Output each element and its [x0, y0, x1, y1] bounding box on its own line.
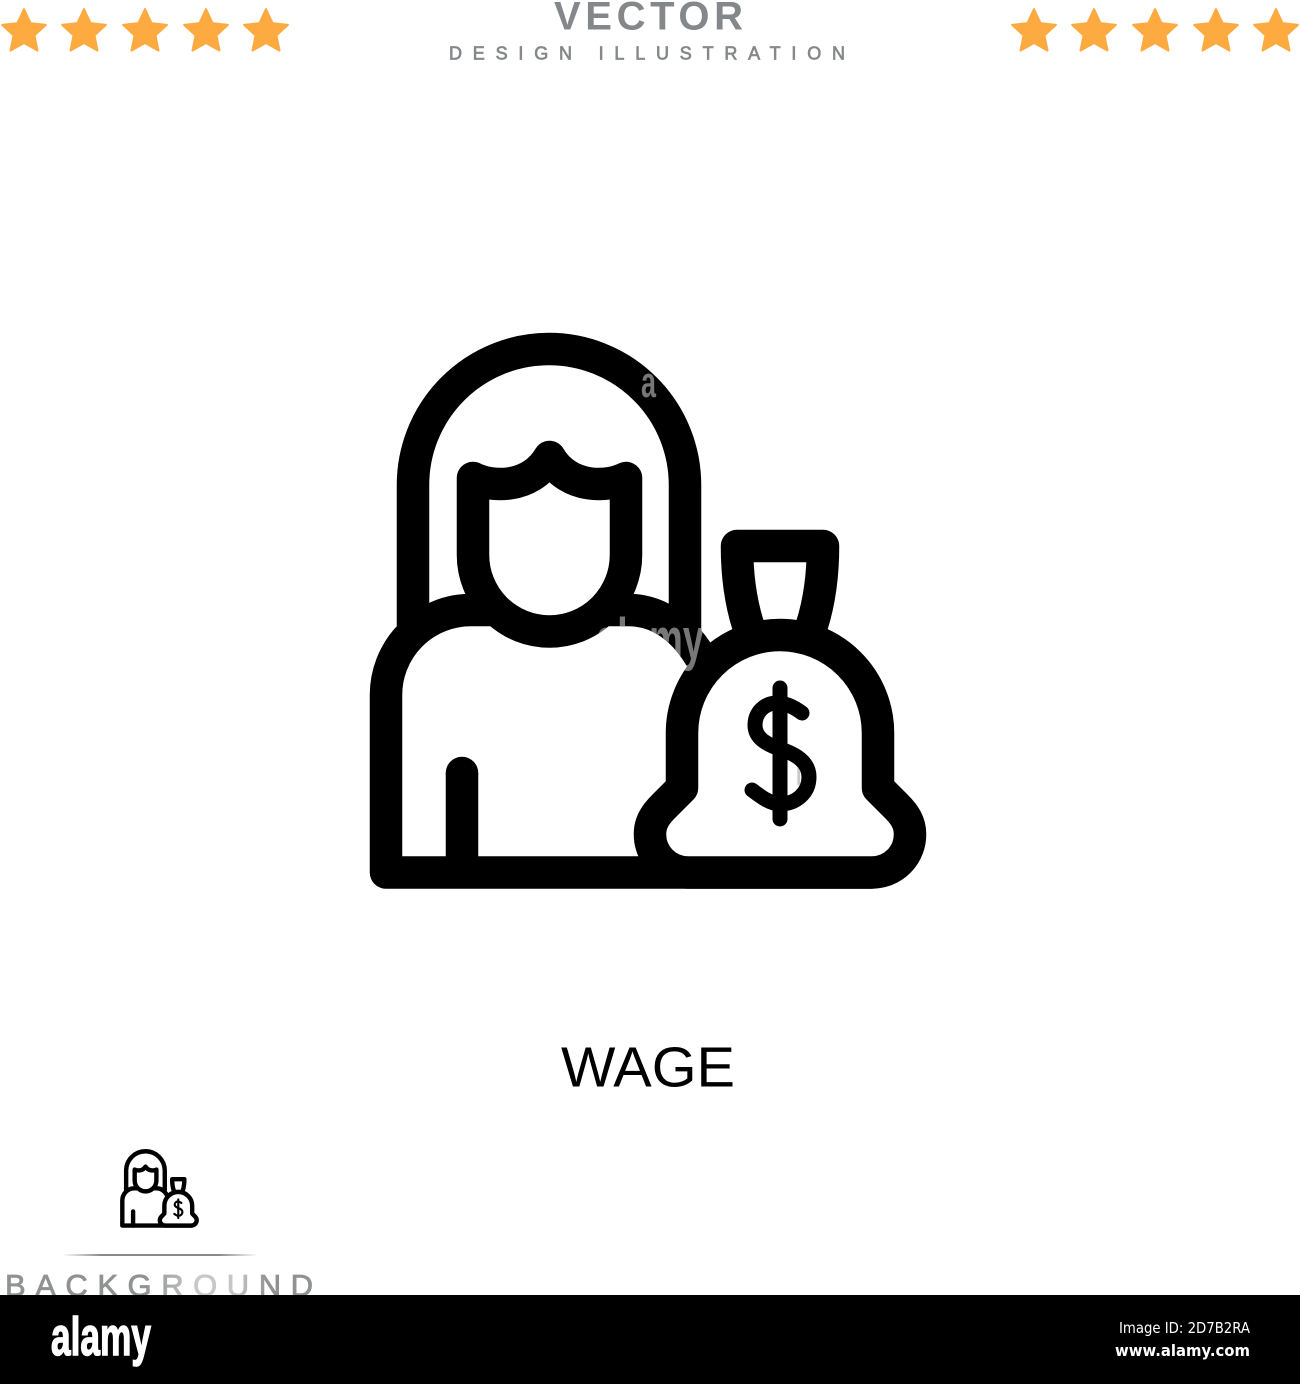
label: background: BACKGROUND [5, 1268, 313, 1303]
text: n [796, 750, 808, 794]
subheading: design illustration: DESIGN ILLUSTRATION [449, 44, 845, 64]
white body fill [386, 610, 702, 872]
money bag neck [737, 546, 823, 625]
hair [413, 349, 685, 640]
money bag neck [172, 1179, 184, 1190]
image id: Image ID: 2D7B2RA [1119, 1319, 1251, 1337]
main icon: woman with money bag [386, 349, 910, 873]
dollar sign [752, 688, 809, 819]
watermark: letter a: a [641, 358, 656, 407]
sleeve line [446, 773, 478, 872]
shoulders and body outline [386, 610, 872, 872]
face with fringe [473, 457, 626, 631]
dollar stroke vertical [772, 688, 788, 819]
star 2 [1072, 9, 1116, 51]
star 3 [123, 9, 167, 51]
star 1 [2, 9, 46, 51]
dollar sign [174, 1199, 182, 1218]
star 2 [62, 9, 106, 51]
star 1 [1012, 9, 1056, 51]
dollar stroke s [174, 1202, 182, 1216]
rating stars right [1012, 9, 1298, 51]
star 4 [184, 9, 228, 51]
website url: www.alamy.com [1115, 1341, 1250, 1360]
footer background [0, 1295, 1300, 1384]
footer bar [0, 1295, 1300, 1384]
divider line [62, 1254, 258, 1256]
sleeve line [118, 1211, 149, 1226]
hair [126, 1151, 165, 1191]
watermark: alamy across the icon: alamy [596, 607, 704, 672]
title: wage: WAGE [561, 1036, 735, 1100]
star 5 [244, 9, 288, 51]
star 5 [1254, 9, 1298, 51]
money bag body [160, 1192, 197, 1226]
star 3 [1133, 9, 1177, 51]
small icon: woman with money bag [122, 1151, 197, 1226]
footer logo: alamy: alamy [51, 1307, 151, 1367]
dollar stroke s [752, 703, 809, 804]
star 4 [1194, 9, 1238, 51]
rating stars left [2, 9, 288, 51]
money bag body [650, 635, 910, 873]
dollar stroke vertical [171, 1199, 186, 1218]
shoulders and body outline [122, 1188, 191, 1226]
sleeve line rounded top [446, 757, 478, 789]
face with fringe [135, 1167, 156, 1191]
